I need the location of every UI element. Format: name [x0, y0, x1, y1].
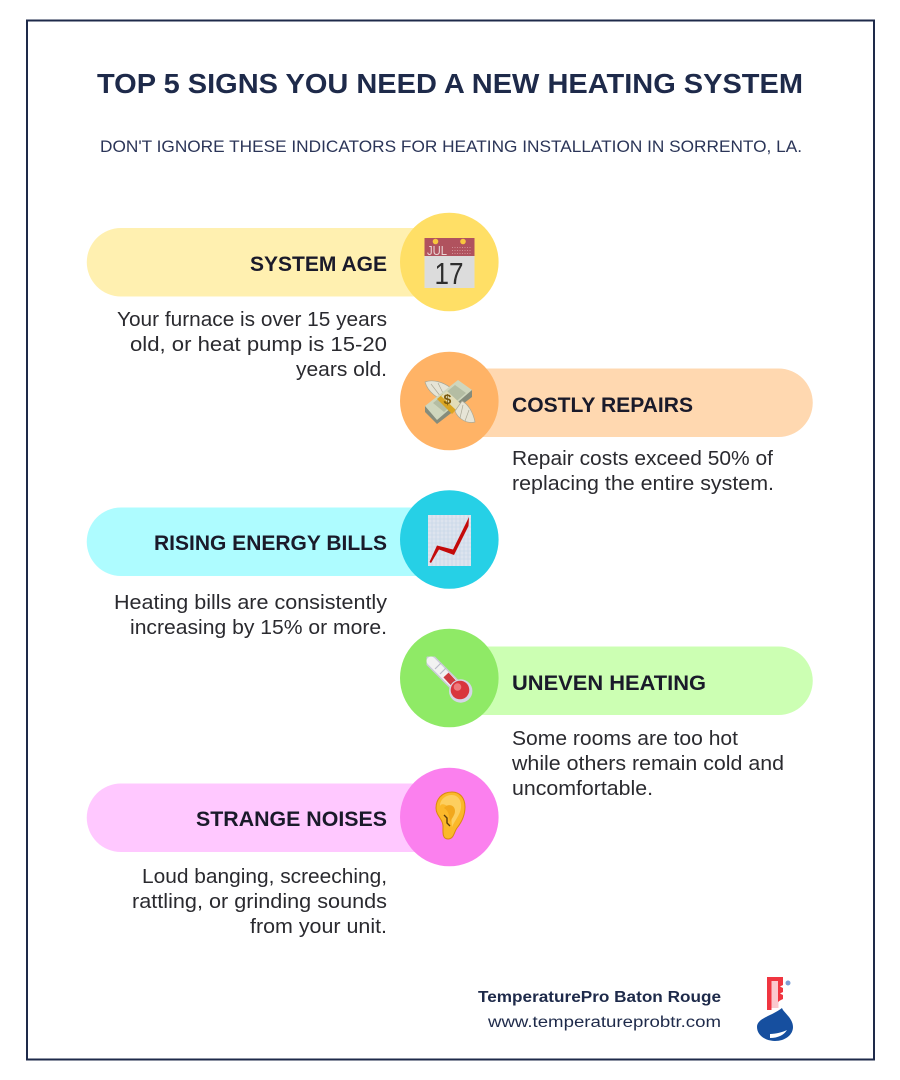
heading: uneven heating: UNEVEN HEATING	[512, 672, 706, 695]
icon circle: calendar	[400, 213, 499, 311]
text: uneven heating description: Some rooms are too hot	[512, 728, 738, 750]
panel: uneven heating	[400, 629, 813, 800]
footer brand	[478, 977, 793, 1041]
text: uneven heating description: uncomfortable.	[512, 778, 653, 800]
text: strange noises description	[132, 866, 387, 938]
pill: costly repairs	[460, 368, 813, 437]
panel: system age	[87, 213, 499, 381]
icon circle: calendar: JUL	[427, 243, 447, 258]
text: rising energy bills description: Heating bills are consistently	[114, 592, 387, 614]
panel: strange noises	[87, 768, 499, 938]
icon circle: money with wings: $	[444, 391, 452, 407]
text: costly repairs description	[512, 448, 774, 495]
text: strange noises description: Loud banging, screeching,	[142, 866, 387, 888]
pill: strange noises	[87, 784, 440, 852]
pill: uneven heating	[460, 646, 813, 715]
text: strange noises description: from your unit.	[250, 916, 387, 938]
text: system age description: old, or heat pump is 15-20	[130, 334, 387, 356]
text: system age description: Your furnace is over 15 years	[117, 309, 387, 331]
text: rising energy bills description: increasing by 15% or more.	[130, 617, 387, 639]
text: rising energy bills description	[114, 592, 387, 639]
icon circle: thermometer	[400, 629, 499, 727]
text: costly repairs description: Repair costs exceed 50% of	[512, 448, 773, 470]
heading: system age: SYSTEM AGE	[250, 253, 387, 276]
text: system age description: years old.	[296, 359, 387, 381]
title: TOP 5 SIGNS YOU NEED A NEW HEATING SYSTEM	[97, 68, 803, 99]
pill: system age	[87, 228, 440, 296]
heading: costly repairs: COSTLY REPAIRS	[512, 394, 693, 417]
text: strange noises description: rattling, or grinding sounds	[132, 891, 387, 913]
icon circle: ear	[400, 768, 499, 866]
icon circle: chart increasing	[400, 490, 499, 589]
subtitle: DON'T IGNORE THESE INDICATORS FOR HEATING INSTALLATION IN SORRENTO, LA.	[100, 137, 802, 156]
text: uneven heating description	[511, 728, 784, 800]
pill: rising energy bills	[87, 508, 440, 576]
icon circle: money with wings	[400, 352, 499, 450]
text: uneven heating description: while others remain cold and	[511, 753, 784, 775]
footer: company name: TemperaturePro Baton Rouge	[478, 989, 721, 1006]
text: system age description	[117, 309, 387, 381]
heading: strange noises: STRANGE NOISES	[196, 808, 387, 831]
panel: costly repairs	[400, 352, 813, 495]
text: costly repairs description: replacing the entire system.	[512, 473, 774, 495]
icon: logo thermometer	[757, 977, 793, 1041]
heading: rising energy bills: RISING ENERGY BILLS	[154, 532, 387, 555]
footer: website: www.temperatureprobtr.com	[487, 1014, 721, 1031]
icon circle: calendar: 17	[434, 256, 464, 291]
panel: rising energy bills	[87, 490, 499, 639]
